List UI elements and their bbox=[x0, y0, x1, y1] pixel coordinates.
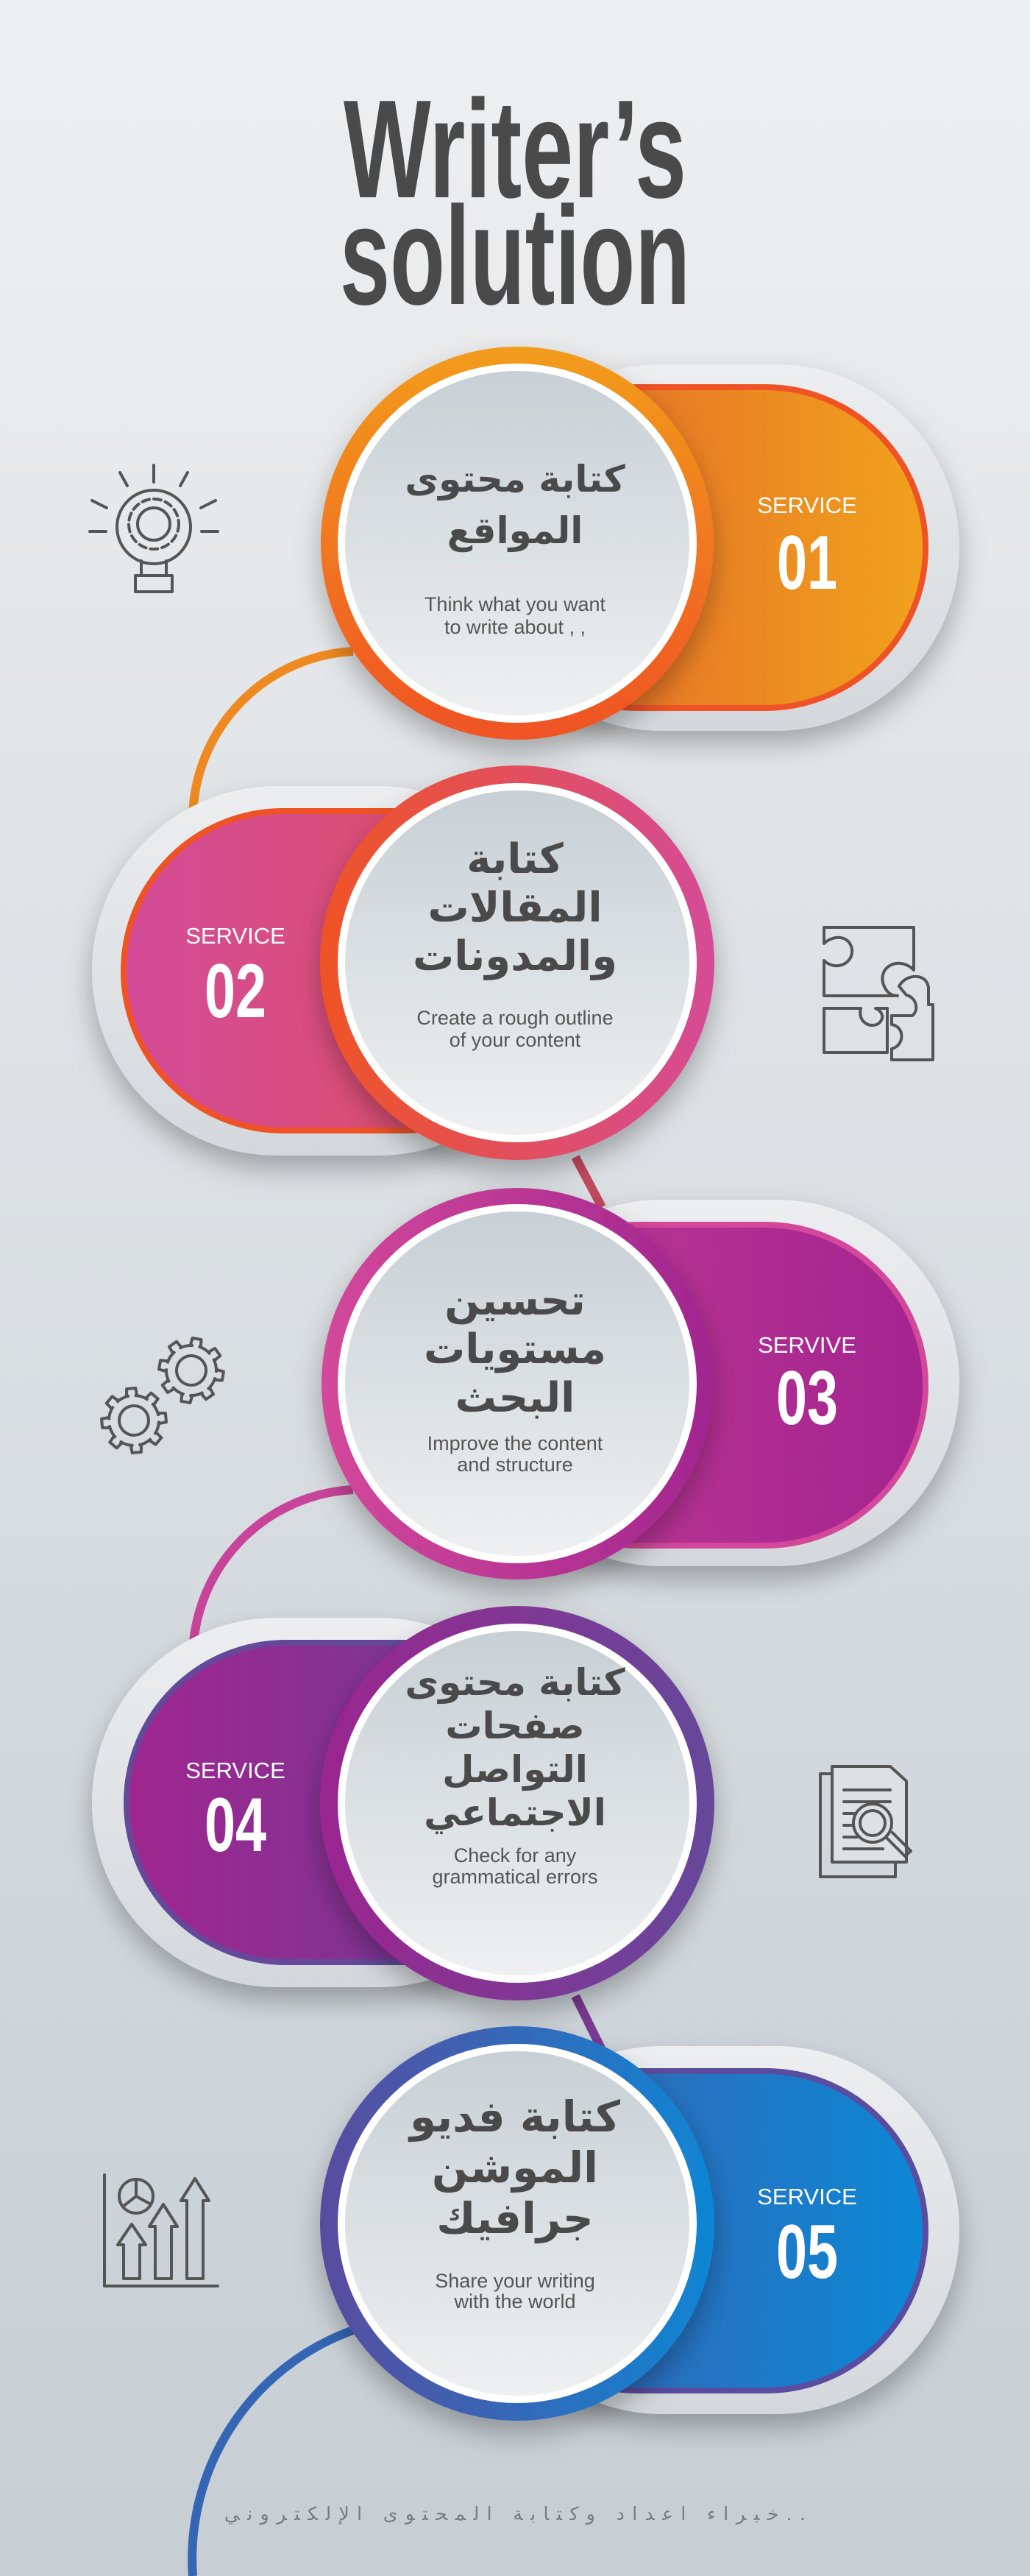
text: service 5: Share your writing bbox=[435, 2270, 595, 2292]
text: service 5: with the world bbox=[453, 2290, 576, 2313]
title bbox=[340, 71, 690, 334]
text: service 5: جرافيك bbox=[436, 2193, 594, 2244]
text: service 2: Create a rough outline bbox=[416, 1007, 614, 1029]
text: service 5 bbox=[408, 2092, 620, 2313]
text: service 5: كتابة فديو bbox=[408, 2092, 620, 2142]
icon: gears bbox=[99, 1333, 229, 1455]
label: service 04: SERVICE bbox=[185, 1758, 285, 1783]
text: service 3: Improve the content bbox=[427, 1432, 603, 1454]
text: service 4: صفحات bbox=[445, 1705, 585, 1747]
text: service 3: البحث bbox=[455, 1374, 575, 1422]
label: service 04: 04 bbox=[205, 1783, 266, 1868]
text: service 1: to write about , , bbox=[444, 616, 586, 638]
title: solution bbox=[340, 178, 690, 334]
text: service 4: grammatical errors bbox=[432, 1866, 598, 1888]
text: service 4: كتابة محتوى bbox=[405, 1661, 626, 1705]
text: service 2 bbox=[413, 835, 617, 1051]
label: service 02 bbox=[185, 923, 285, 1034]
text: service 4: Check for any bbox=[454, 1844, 577, 1866]
text: service 2: المقالات bbox=[427, 884, 603, 932]
icon: lightbulb bbox=[90, 465, 218, 592]
label: service 03: 03 bbox=[776, 1356, 838, 1441]
label: service 04 bbox=[185, 1758, 285, 1868]
label: service 03 bbox=[758, 1332, 856, 1441]
label: service 05: SERVICE bbox=[757, 2184, 857, 2209]
title: Writer’s bbox=[344, 71, 686, 227]
text: service 2: of your content bbox=[450, 1029, 581, 1051]
text: service 4: التواصل bbox=[442, 1748, 588, 1791]
text: service 3 bbox=[424, 1277, 606, 1476]
label: service 05 bbox=[757, 2184, 857, 2295]
text: service 4: الاجتماعي bbox=[424, 1791, 606, 1834]
service 5 bbox=[320, 2026, 959, 2421]
label: service 02: 02 bbox=[205, 949, 266, 1034]
label: service 02: SERVICE bbox=[185, 923, 285, 949]
text: service 3: تحسين bbox=[444, 1277, 586, 1325]
service 1 bbox=[321, 347, 959, 740]
label: service 03: SERVIVE bbox=[758, 1332, 856, 1358]
label: service 05: 05 bbox=[776, 2209, 838, 2295]
service 4 bbox=[92, 1606, 714, 2000]
text: service 2: كتابة bbox=[466, 835, 564, 883]
text: service 5: الموشن bbox=[432, 2142, 598, 2193]
text: service 1: كتابة محتوى bbox=[405, 458, 626, 501]
label: service 01 bbox=[757, 492, 857, 606]
label: service 01: SERVICE bbox=[757, 492, 857, 518]
text: service 1 bbox=[405, 458, 626, 638]
text: service 4 bbox=[405, 1661, 626, 1888]
service 3 bbox=[322, 1188, 959, 1579]
icon: document search bbox=[820, 1766, 911, 1877]
icon: growth chart bbox=[104, 2175, 218, 2286]
text: service 1: Think what you want bbox=[425, 593, 606, 615]
text: service 3: مستويات bbox=[424, 1326, 606, 1373]
connector arcs bbox=[192, 651, 602, 2576]
icon: puzzle bbox=[824, 927, 933, 1060]
service 2 bbox=[92, 765, 714, 1160]
text: service 3: and structure bbox=[457, 1454, 573, 1476]
footer text: خبراء اعداد وكتابة المحتوى الإلكتروني.. bbox=[224, 2503, 806, 2525]
text: service 1: المواقع bbox=[447, 509, 583, 553]
label: service 01: 01 bbox=[777, 520, 837, 606]
text: service 2: والمدونات bbox=[413, 933, 617, 980]
